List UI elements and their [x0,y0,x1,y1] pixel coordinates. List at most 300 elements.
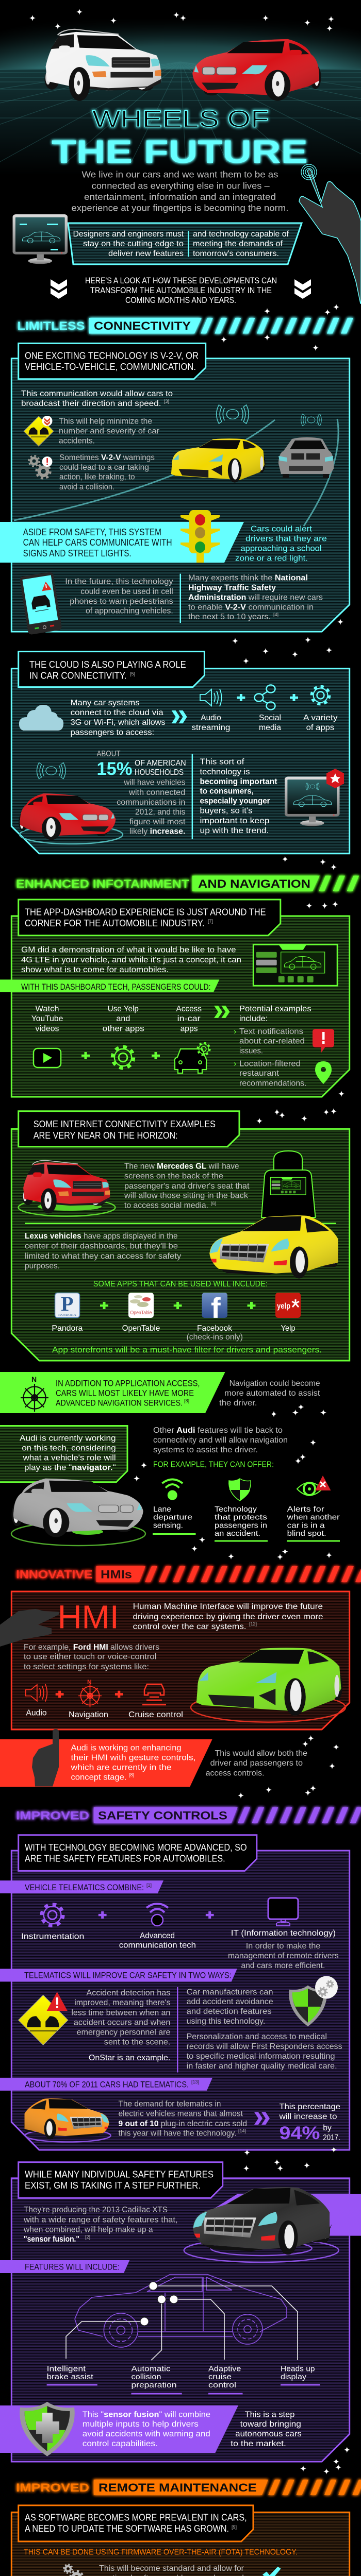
text: Mercedes GL [124,1162,250,1210]
section heading: enhanced infotainment and navigation [16,876,361,891]
icon: Yelp: yelp [277,1302,290,1311]
icon: crash warning [24,416,54,446]
heading tab: WHILE MANY INDIVIDUAL SAFETY FEATURES [25,2168,214,2179]
labels: telematics: communication tech [119,1941,196,1950]
panel: safety features [0,1835,350,2150]
section heading: improved safety controls: SAFETY CONTROLS [98,1809,227,1822]
text: warnings [59,453,155,492]
label: collision preparation: collision [131,2372,161,2381]
intro text [71,170,288,213]
icon: phone with warning [19,572,62,635]
band: Audi gesture controls: their HMI with gesture controls, [71,1753,196,1762]
labels: telematics: and cars more efficient. [241,1961,325,1970]
icons: audio, social, apps [200,685,330,710]
heading tab: [9] [232,2524,237,2530]
stars [221,304,339,351]
feature: protects passengers [215,1479,268,1541]
stars [243,2146,337,2172]
stat: 15 percent: 2012, and this [135,808,185,817]
text: cloud access: passengers to access: [71,728,154,737]
text: consumers: important to keep [200,817,270,825]
text: accident detection: improved, meaning there's [74,1998,170,2007]
text: warnings: action, like braking, to [59,473,135,482]
title line: wheels of: WHEELS OF [92,105,269,132]
band: features include: FEATURES WILL INCLUDE: [25,2262,120,2272]
car: white SUV [44,29,161,101]
text: Cadillac XTS: "sensor fusion." [24,2235,79,2244]
labels: apps [52,1324,296,1342]
text: NHTSA: [4] [273,612,278,617]
heading: FOTA: THIS CAN BE DONE USING FIRMWARE OVER-THE-AIR (FOTA) TECHNOLOGY. [24,2548,298,2557]
text: accident detection [71,1989,171,2062]
label: adaptive cruise: control [208,2381,236,2389]
labels: audio, social, apps: streaming [191,723,230,732]
band: two ways: TELEMATICS WILL IMPROVE CAR SAFETY IN TWO WAYS: [24,1971,232,1980]
text: both driver and passengers: access controls. [206,1769,264,1777]
label: adaptive cruise: cruise [208,2372,232,2381]
labels: telematics: Advanced [140,1931,175,1940]
feature: lane departure: departure [153,1513,192,1522]
heading tab: ONE EXCITING TECHNOLOGY IS V-2-V, OR [25,350,199,361]
car: red coupe with rings [19,793,123,844]
stars [232,619,343,870]
road curves [14,419,338,526]
text: automated navigation: the driver. [219,1399,257,1408]
heading: apps: SOME APPS THAT CAN BE USED WILL INCLUDE: [93,1280,268,1289]
labels: dashboard features [31,1005,202,1033]
stat: 94 percent: by [323,2124,332,2132]
stat: 15 percent: 15% [97,759,132,779]
text: both driver and passengers: driver and passengers to [210,1759,303,1768]
labels: dashboard features: other apps [103,1024,144,1033]
section heading: improved remote maintenance: IMPROVED [16,2481,89,2494]
band: aside from safety [0,522,244,563]
text: demand for telematics: [14] [238,2128,246,2133]
text: cloud access: Many car systems [71,699,140,707]
panel: Audi navigator [0,1426,127,1482]
text: GM demonstration: 4G LTE in your vehicle, and while it's just a concept, it can [21,956,241,964]
heading tab [19,1835,257,1871]
text: consumers: buyers, so it's [200,807,253,816]
band: Audi gesture controls: which are currently in the [70,1764,172,1772]
stat: 94 percent: This percentage [280,2103,340,2111]
row: continual upgrades: This will become standard and allow for [99,2564,244,2573]
band: sensor fusion: avoid accidents with warning and [83,2430,210,2438]
labels: audio, social, apps: of apps [306,723,334,732]
section heading: innovative HMIs: INNOVATIVE [16,1568,93,1581]
text: alert drivers: zone or a red light. [235,554,308,563]
heading tab [19,2505,253,2541]
text: autonomous cars [231,2410,302,2448]
band: sensor fusion: This "sensor fusion" will combine [83,2410,210,2419]
panel: designers and engineers: meeting the demands of [193,240,283,248]
label: brake assist: brake assist [47,2372,94,2381]
heading tab: [5] [130,671,135,676]
car: silver coupe with rings [11,1479,145,1546]
panel: HMI [0,1591,350,1730]
panel: designers and engineers: deliver new features [108,249,184,258]
labels: apps: Pandora [52,1324,83,1333]
intro text: We live in our cars and we want them to be as [81,170,278,180]
band: 70 percent [0,2078,212,2091]
text: accident detection: less time between when an [71,2008,170,2017]
car: black sedan with rings [184,2187,339,2262]
intro text: experience at your fingertips is becoming the norm. [71,203,288,213]
band: advanced navigation: ADVANCED NAVIGATION SERVICES. [56,1398,183,1408]
text: NHTSA: Highway Traffic Safety [188,584,276,592]
band: aside from safety: SIGNS AND STREET LIGHTS. [23,548,132,558]
icon: gears with alert [29,456,53,478]
lead-in text with chevrons: COMING MONTHS AND YEARS. [125,295,236,305]
panel: Audi navigator: play as the " navigator." [24,1464,116,1472]
text: minimize accidents: number and severity of car [59,427,160,435]
text: consumers: especially younger [200,797,270,806]
labels: apps: (check-ins only) [187,1333,243,1342]
text: automated navigation: Navigation could become [229,1379,320,1388]
text: broadcast: [3] [164,399,169,404]
labels: telematics: In order to make the [246,1942,321,1951]
section heading: limitless connectivity: LIMITLESS [18,319,85,332]
icons: wireless signals [217,405,321,426]
labels: dashboard features: videos [35,1024,59,1033]
text: Ford HMI: For example, Ford HMI allows drivers [24,1643,159,1652]
label: heads up display [281,2365,320,2385]
stat: 15 percent: figure will most [129,818,186,826]
heading tab: THE CLOUD IS ALSO PLAYING A ROLE [29,659,186,670]
icon: Pandora [55,1292,79,1318]
band: sensor fusion: multiple inputs to help drivers [83,2420,199,2429]
text: Cadillac XTS: [2] [85,2234,90,2240]
callout dots [140,2282,178,2326]
label: collision preparation [131,2365,182,2395]
text: broadcast: broadcast their direction and speed. [21,399,161,408]
labels: audio, navigation, cruise control [26,1709,183,1719]
text: other Audi features: Other Audi features will tie back to [153,1426,283,1435]
lead-in text with chevrons: TRANSFORM THE AUTOMOBILE INDUSTRY IN THE [90,285,272,295]
panel: app dashboard [0,900,350,1097]
text: automated navigation [219,1379,320,1408]
panel: designers and engineers: tomorrow's consumers. [193,249,279,258]
text: HMI description: Human Machine Interface will improve the future [133,1602,323,1611]
stat: 94 percent [278,2103,340,2143]
band: Audi gesture controls: concept stage. [71,1773,127,1782]
feature: protects passengers: passengers in [215,1521,267,1530]
text: Mercedes GL: passenger's and driver's seat that [124,1182,250,1191]
text: consumers: to consumers, [200,787,254,796]
text: Mercedes GL: screens on the back of the [124,1172,223,1181]
text: other Audi features: systems to assist the driver. [153,1446,258,1454]
band: telematics combine [0,1880,163,1893]
text: Cadillac XTS: They're producing the 2013 Cadillac XTS [24,2206,168,2214]
text: Cadillac XTS: with a wide range of safety features that, [23,2216,178,2225]
text: potential examples: › [234,1059,236,1068]
text: NHTSA [188,573,323,621]
band: features include [0,2260,129,2273]
car: gray sedan front [278,437,334,478]
icon: monitor with car [12,214,68,264]
band: advanced navigation [0,1372,225,1413]
panel: GM sensor fusion [0,2162,361,2462]
car: orange sedan with ring [23,2098,111,2142]
stat: 15 percent [97,750,186,836]
heading tab: [7] [208,919,213,924]
diagram: wireframe car with callouts [66,2275,298,2360]
intro text: connected as everything else in our lives – [92,180,270,191]
band: telematics combine: VEHICLE TELEMATICS COMBINE: [25,1883,144,1892]
text: potential examples: restaurant [239,1069,280,1078]
icon: OpenTable [128,1293,154,1318]
icons: play, gear, car [34,1043,210,1073]
labels: dashboard features: and [116,1014,130,1023]
panel: designers and engineers: and technology capable of [193,230,289,239]
feature: blind spot: Alerts for [287,1505,324,1514]
panel: cloud [11,652,350,854]
big HMI label: HMI [58,1599,119,1636]
purple band behind car [211,2194,361,2236]
labels: audio, navigation, cruise control: Cruise control [128,1710,183,1719]
heading tab: EXIST, GM IS TAKING IT A STEP FURTHER. [25,2180,201,2191]
text: other Audi features [153,1426,288,1454]
feature: lane departure [153,1479,196,1535]
heading tab: AS SOFTWARE BECOMES MORE PREVALENT IN CARS, [25,2512,247,2522]
heading tab [19,652,204,687]
labels: apps: Yelp [281,1324,296,1333]
band: 70 percent: ABOUT 70% OF 2011 CARS HAD TELEMATICS. [25,2079,189,2089]
labels: dashboard features: Access [176,1005,202,1013]
text: Cadillac XTS: when combined, will help make up a [23,2226,153,2234]
icon: large shield with cross [20,2402,75,2456]
text: HMI description: control over the car systems. [133,1622,247,1631]
text: demand for telematics [119,2100,247,2138]
stars [238,1735,339,1799]
text: NHTSA: to enable V-2-V communication in [188,603,314,612]
icon: chevrons [254,2112,270,2125]
section heading: limitless connectivity: CONNECTIVITY [94,319,191,332]
app icons [55,1292,301,1324]
band: advanced navigation: IN ADDITION TO APPLICATION ACCESS, [56,1379,200,1388]
heading tab: SOME INTERNET CONNECTIVITY EXAMPLES [34,1118,216,1129]
labels: apps: OpenTable [122,1324,160,1333]
text: accident detection: emergency personnel are [77,2028,171,2037]
feature: blind spot: when another [287,1513,340,1522]
label: brake assist: Intelligent [47,2365,86,2373]
text: Lexus: purposes. [25,1262,60,1270]
band: sensor fusion: control capabilities. [83,2439,158,2448]
text: potential examples: issues. [239,1046,263,1055]
stat: 15 percent: ABOUT [97,750,121,758]
label: collision preparation: preparation [131,2381,176,2389]
stat: 15 percent: likely increase. [129,827,185,836]
section heading: limitless connectivity [18,318,355,334]
icons: telematics [42,1898,298,1926]
text: cell phones: of approaching vehicles. [86,607,173,616]
title line: the future: THE FUTURE [52,134,308,170]
band: sensor fusion [0,2405,238,2453]
heading tab: ARE THE SAFETY FEATURES FOR AUTOMOBILES. [25,1853,225,1864]
band: aside from safety: ASIDE FROM SAFETY, THIS SYSTEM [23,527,161,537]
stars [134,1404,332,1560]
text: minimize accidents [59,417,160,446]
icon: Pandora: P [61,1292,73,1315]
label: adaptive cruise [208,2365,242,2395]
callout lines [66,2286,298,2360]
text: alert drivers [235,524,327,563]
section heading: improved remote maintenance: REMOTE MAINTENANCE [99,2481,257,2494]
labels: apps: Facebook [197,1324,233,1333]
icon: Facebook: f [211,1292,221,1324]
feature: blind spot: blind spot. [287,1529,326,1538]
text: consumers [200,758,277,835]
heading tab: THE APP-DASHBOARD EXPERIENCE IS JUST AROUND THE [25,906,266,917]
title [52,105,308,170]
stat: 15 percent: with connected [128,788,185,797]
section heading: improved safety controls: IMPROVED [16,1809,89,1822]
section heading: enhanced infotainment and navigation: ENHANCED INFOTAINMENT [16,877,190,890]
text: warnings: avoid a collision. [59,483,114,492]
text: Ford HMI: to select settings for systems like: [24,1663,149,1671]
text: GM demonstration: show what is to come for automobiles. [21,965,169,974]
heading tab: ARE VERY NEAR ON THE HORIZON: [34,1130,178,1141]
text: GM demonstration [21,946,241,974]
labels: dashboard features: in-car [177,1014,201,1023]
panel: designers and engineers: Designers and engineers must [73,230,184,239]
icon: pointing hand [299,164,361,303]
text: GM demonstration: GM did a demonstration of what it would be like to have [21,946,236,955]
text: Lexus [25,1232,181,1270]
panel: designers and engineers [68,223,302,264]
text: autonomous cars: to the market. [231,2439,286,2448]
labels: audio, social, apps: A variety [303,714,337,722]
lead-in text with chevrons: HERE'S A LOOK AT HOW THESE DEVELOPMENTS CAN [85,276,277,285]
text: cell phones: could even be used in cell [80,587,173,596]
text: autonomous cars: autonomous cars [235,2430,302,2438]
icon: chevrons [172,710,187,723]
text: accident detection: OnStar is an example. [89,2054,170,2062]
text: potential examples: include: [239,1014,268,1023]
heading tab: WITH TECHNOLOGY BECOMING MORE ADVANCED, SO [25,1842,247,1853]
band: advanced navigation: CARS WILL MOST LIKELY HAVE MORE [56,1388,194,1398]
text: HMI description: driving experience by giving the driver even more [133,1613,323,1621]
band: two ways [0,1969,237,1981]
heading tab [19,900,281,936]
text: warnings: Sometimes V-2-V warnings [59,453,155,462]
text: Lexus: center of their dashboards, but they'll be [25,1242,178,1251]
icon: shield with gears [289,1976,338,2026]
text: cloud access [71,699,166,737]
feature: lane departure: sensing. [153,1521,183,1530]
icon: car seat with screen [261,1151,316,1217]
stat: 15 percent: will have vehicles [123,778,185,787]
heading tab: CORNER FOR THE AUTOMOBILE INDUSTRY. [25,918,204,928]
text: accident avoidance: to specific medical information resulting [187,2052,335,2061]
intro text: entertainment, information and an integrated [84,192,276,202]
band: Audi gesture controls [0,1729,212,1787]
text: demand for telematics: The demand for telematics in [119,2100,221,2109]
section heading: innovative HMIs: HMIs [101,1568,132,1581]
icon: chevrons [214,1006,230,1018]
feature: lane departure: Lane [153,1505,171,1514]
text: Mercedes GL: [6] [211,1201,216,1206]
icon: compass: N [31,1375,37,1383]
icons: audio, navigation, cruise control [26,1679,166,1707]
text: potential examples: › [234,1027,236,1036]
stat: 15 percent: HOUSEHOLDS [135,768,184,777]
text: accident avoidance: using this technology. [187,2017,265,2026]
stat: 15 percent: communications in [117,798,185,807]
text: accident detection: accident occurs and when [74,2019,170,2027]
panel: Audi navigator: Audi is currently working [20,1434,116,1443]
heading tab: VEHICLE-TO-VEHICLE, COMMUNICATION. [25,361,196,372]
section heading: improved safety controls [16,1807,361,1823]
text: minimize accidents: This will help minimize the [59,417,152,426]
car: red SUV with rings [19,1160,116,1216]
section heading: improved remote maintenance [16,2480,361,2495]
text: alert drivers: drivers that they are [245,535,327,544]
text: potential examples: about car-related [239,1037,305,1046]
icon: dashboard screen [253,944,337,986]
text: cell phones [65,578,173,616]
heading tab: A NEED TO UPDATE THE SOFTWARE HAS GROWN. [25,2523,229,2534]
text: Ford HMI [24,1643,159,1671]
hero: night sky and grid [0,0,361,175]
band: telematics combine: [1] [146,1883,152,1888]
text: alert drivers: Cars could alert [251,524,313,533]
labels: telematics: Instrumentation [21,1933,84,1941]
labels: dashboard features: Watch [35,1005,59,1013]
band: Audi gesture controls: [8] [129,1772,134,1777]
car: yellow sedan [209,1215,340,1279]
text: automated navigation: more automated to assist [224,1389,320,1398]
heading tab [19,1111,239,1147]
labels: dashboard features: Use Yelp [108,1005,139,1013]
text: demand for telematics: electric vehicles means that almost [119,2109,243,2119]
heading: for example: FOR EXAMPLE, THEY CAN OFFER: [153,1460,274,1469]
row: continual upgrades [64,2564,281,2576]
text: potential examples: Location-filtered [239,1059,301,1068]
car: red coupe [192,39,321,101]
feature: protects passengers: Technology [215,1505,257,1514]
stat: 94 percent: 94% [280,2123,320,2143]
feature: protects passengers: an accident. [215,1529,260,1538]
band: passengers could [0,979,219,992]
text: potential examples: recommendations. [239,1079,306,1088]
text: warnings: could lead to a car taking [59,463,149,472]
stat: 15 percent: OF AMERICAN [135,759,186,768]
text: Mercedes GL: will allow those sitting in the back [124,1192,249,1200]
icon: Facebook [202,1292,227,1324]
text: both driver and passengers: This would allow both the [215,1749,307,1758]
icons: audio, navigation, cruise control: N [87,1679,92,1686]
label: brake assist [47,2365,97,2385]
text: consumers: technology is [200,768,250,776]
heading tab [19,343,206,379]
labels: telematics [21,1929,339,1970]
stat: 94 percent: will increase to [278,2112,337,2121]
text: both driver and passengers [206,1749,307,1777]
text: other Audi features: connectivity and will allow navigation [153,1436,288,1445]
icon: raised finger fist [32,1729,59,1787]
text: HMI description: [12] [249,1621,257,1626]
section heading: innovative HMIs [16,1566,361,1582]
feature: blind spot [287,1476,340,1541]
text: NHTSA: Many experts think the National [188,573,308,582]
label: heads up display: display [281,2372,307,2381]
icon: red alert bubble [313,1029,334,1053]
feature: protects passengers: that protects [215,1513,267,1522]
icon: signal [37,762,65,779]
section heading: enhanced infotainment and navigation: AND NAVIGATION [198,877,310,890]
text: Mercedes GL: The new Mercedes GL will have [124,1162,239,1171]
